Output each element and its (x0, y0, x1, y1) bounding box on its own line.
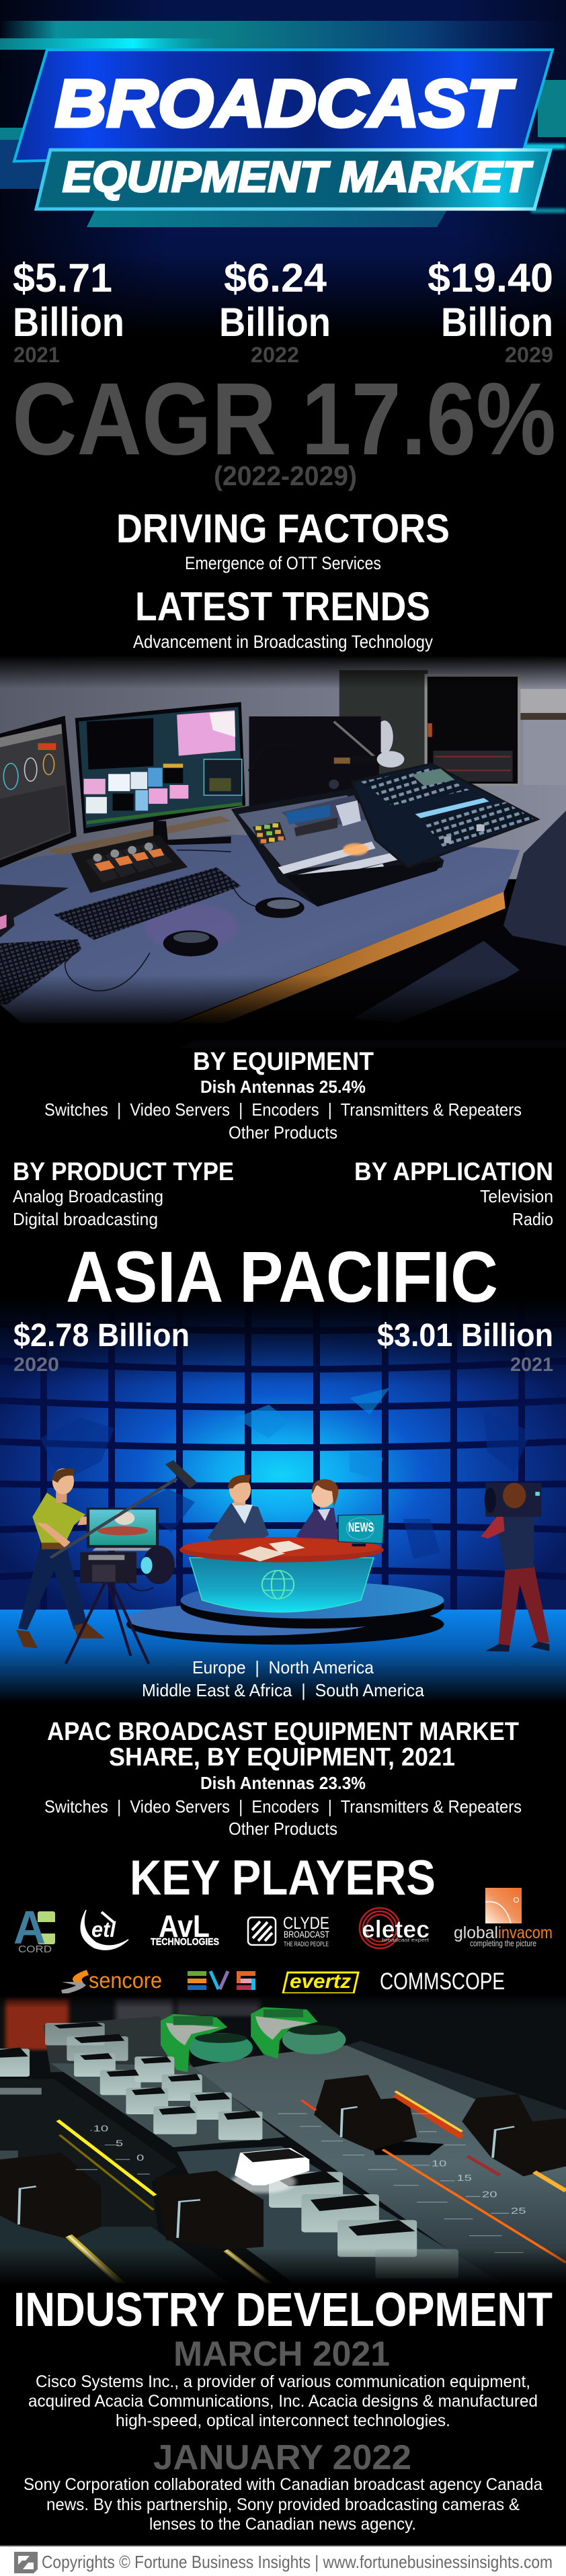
text: January 2022 development (24, 2475, 542, 2534)
video monitor (87, 1507, 159, 1550)
heading: latest trends: LATEST TRENDS (135, 584, 430, 629)
logo: Eletec (360, 1908, 430, 1948)
market size 2021: Billion (13, 300, 124, 345)
block: by product type: Analog Broadcasting (13, 1186, 163, 1206)
logo: Clyde Broadcast: BROADCAST (284, 1929, 329, 1940)
text: January 2022 development: lenses to the Canadian news agency. (149, 2515, 416, 2534)
photo: broadcast control desk (0, 655, 566, 1048)
heading: APAC share (47, 1718, 519, 1772)
logo: AC Cord: CORD (18, 1944, 52, 1955)
text: regions line 2: Middle East & Africa | South America (142, 1680, 425, 1700)
market size 2021: 2021 (13, 343, 60, 367)
fader caps (0, 2075, 566, 2249)
logo: AVL Technologies: TECHNOLOGIES (151, 1936, 219, 1948)
label: NEWS: NEWS (348, 1521, 374, 1535)
market size 2029: $19.40 (428, 255, 553, 300)
text: latest trend: Advancement in Broadcasting Technology (133, 632, 433, 652)
heading: APAC share: SHARE, BY EQUIPMENT, 2021 (109, 1743, 455, 1772)
title: BROADCAST: BROADCAST (55, 66, 516, 140)
logo: ETL (81, 1910, 128, 1950)
logo: Eletec: broadcast expert (382, 1938, 429, 1943)
market size 2021 (13, 255, 124, 367)
studio camera on tripod (66, 1546, 175, 1664)
text: other products: Other Products (229, 1122, 337, 1142)
heading: by equipment: BY EQUIPMENT (193, 1048, 374, 1076)
logo: Global Invacom: global (454, 1923, 498, 1942)
text: March 2021 development: acquired Acacia Communications, Inc. Acacia designs & manufactured (28, 2392, 538, 2411)
Asia Pacific value 2021: 2021 (510, 1354, 553, 1376)
market size 2021: $5.71 (13, 255, 112, 300)
news desk (179, 1538, 384, 1612)
illuminated fader tracks (58, 2091, 566, 2285)
news anchors (208, 1474, 339, 1547)
Asia Pacific value 2021: $3.01 Billion (377, 1318, 553, 1354)
photo: audio mixer close-up: 10 (93, 2124, 108, 2134)
Asia Pacific value 2021 (377, 1318, 553, 1376)
icon: Fortune Business Insights logo (14, 2552, 38, 2573)
photo: audio mixer close-up: 25 (511, 2206, 526, 2216)
camera operator (481, 1483, 549, 1652)
studio platform (126, 1582, 444, 1645)
logo: AVL Technologies: AvL (159, 1909, 210, 1944)
logo: AC Cord: A (13, 1901, 46, 1954)
logo: Global Invacom (454, 1888, 553, 1948)
footer (0, 2545, 566, 2576)
logo: CommScope: COMMSCOPE (380, 1968, 505, 1995)
photo: audio mixer close-up: 10 (432, 2159, 446, 2168)
heading: Asia Pacific: ASIA PACIFIC (66, 1236, 498, 1317)
photo: audio mixer close-up: 5 (116, 2138, 123, 2148)
illustration: news studio (0, 1297, 566, 1704)
logo: Global Invacom: invacom (498, 1923, 553, 1942)
block: by product type: BY PRODUCT TYPE (13, 1158, 234, 1186)
Asia Pacific value 2020: $2.78 Billion (13, 1318, 190, 1354)
market size 2022: Billion (219, 300, 331, 345)
block: by application (354, 1158, 553, 1229)
logo: EVS (188, 1971, 255, 1990)
photo: audio mixer close-up: 0 (136, 2153, 144, 2163)
green illuminated keys (161, 2007, 346, 2072)
text: regions line 1: Europe | North America (192, 1657, 374, 1677)
text: APAC equipment list: Switches | Video Servers | Encoders | Transmitters & Repeaters (44, 1796, 522, 1817)
subtitle plate (36, 150, 551, 209)
main title plate (14, 50, 553, 161)
photo: audio mixer close-up (0, 1993, 566, 2297)
heading: driving factors: DRIVING FACTORS (116, 506, 450, 551)
boom microphone (50, 1460, 198, 1558)
logo: Clyde Broadcast: CLYDE (283, 1914, 329, 1933)
logo: ETL: etl (91, 1917, 116, 1942)
text: March 2021 development: high-speed, optical interconnect technologies. (116, 2411, 450, 2430)
title: EQUIPMENT MARKET: EQUIPMENT MARKET (63, 153, 533, 201)
date: March 2021: MARCH 2021 (173, 2335, 390, 2374)
block: by product type: Digital broadcasting (13, 1209, 158, 1229)
text: January 2022 development: news. By this partnership, Sony provided broadcasting cameras & (46, 2495, 520, 2514)
market size 2022 (219, 255, 331, 367)
boom operator (16, 1468, 120, 1649)
market size 2029 (428, 255, 553, 367)
desk monitor (338, 1514, 385, 1546)
text: APAC leading share: Dish Antennas 23.3% (200, 1773, 366, 1793)
date: January 2022: JANUARY 2022 (153, 2438, 411, 2477)
lit button (231, 2148, 309, 2193)
market size 2029: Billion (441, 300, 553, 345)
logo: Clyde Broadcast: THE RADIO PEOPLE (284, 1941, 329, 1948)
photo: audio mixer close-up: 15 (456, 2173, 472, 2183)
text: leading equipment share: Dish Antennas 25.4% (200, 1077, 366, 1097)
photo: audio mixer close-up: 20 (482, 2190, 497, 2199)
logo: Clyde Broadcast (248, 1914, 329, 1948)
panel: header banner (0, 0, 566, 336)
block: by application: Radio (512, 1209, 553, 1229)
CAGR period: (2022-2029) (214, 460, 357, 491)
heading: key players: KEY PLAYERS (130, 1851, 436, 1905)
heading: APAC share: APAC BROADCAST EQUIPMENT MARKET (47, 1718, 519, 1746)
logo: Evertz: evertz (290, 1970, 351, 1993)
market size 2022: 2022 (251, 343, 299, 367)
block: by product type (13, 1158, 234, 1229)
text: equipment list: Switches | Video Servers | Encoders | Transmitters & Repeaters (44, 1099, 522, 1120)
text: January 2022 development: Sony Corporation collaborated with Canadian broadcast agency Canada (24, 2475, 542, 2494)
block: by application: Television (480, 1186, 553, 1206)
Asia Pacific value 2020 (13, 1318, 190, 1376)
text: driving factor: Emergence of OTT Services (185, 553, 381, 573)
logo: Sencore (61, 1968, 162, 1995)
Asia Pacific value 2020: 2020 (13, 1354, 59, 1376)
text: March 2021 development (28, 2372, 538, 2430)
panel push buttons (0, 2023, 458, 2278)
market size 2022: $6.24 (224, 255, 327, 300)
block: by application: BY APPLICATION (354, 1158, 553, 1186)
logo: Global Invacom: completing the picture (470, 1938, 536, 1948)
text: March 2021 development: Cisco Systems Inc., a provider of various communication equipment, (36, 2372, 530, 2391)
logo: Eletec: eletec (362, 1915, 430, 1943)
logo: Sencore: sencore (89, 1968, 162, 1993)
market size 2029: 2029 (505, 343, 553, 367)
text: APAC other products: Other Products (229, 1819, 337, 1839)
